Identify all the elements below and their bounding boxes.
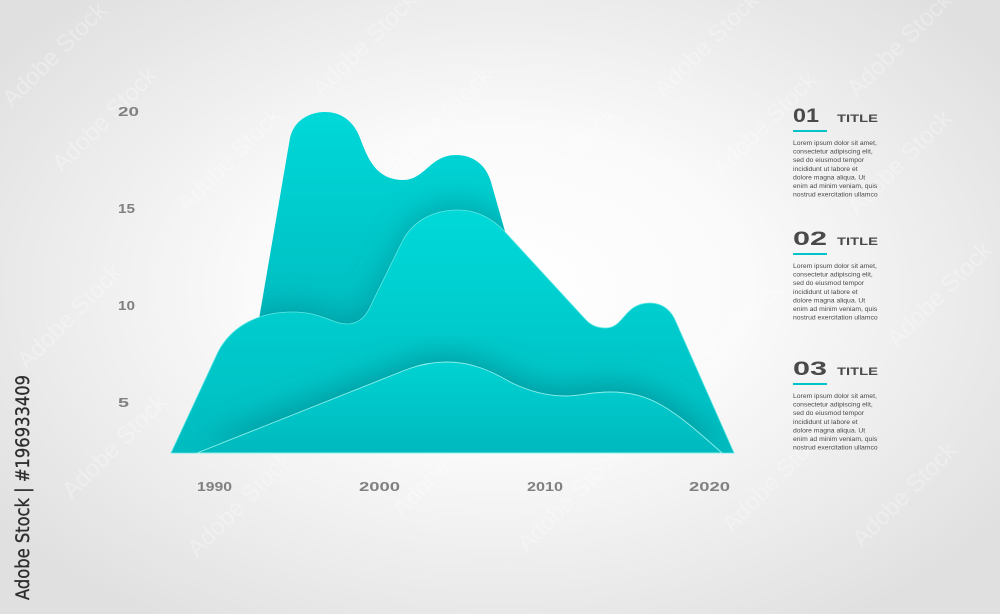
description 01: consectetur adipiscing elit, <box>793 149 873 156</box>
description 02: enim ad minim veniam, quis <box>793 306 878 313</box>
description 03: dolore magna aliqua. Ut <box>793 427 865 434</box>
watermark pattern: Adobe Stock <box>717 421 833 537</box>
middle layer area <box>171 210 734 453</box>
title 03: TITLE <box>837 366 878 378</box>
x axis labels: 2010 <box>527 479 563 494</box>
underline 02 <box>793 253 827 255</box>
number 02: 02 <box>793 229 827 250</box>
description 03: enim ad minim veniam, quis <box>793 436 878 443</box>
description 01: incididunt ut labore et <box>793 166 858 173</box>
description 01: Lorem ipsum dolor sit amet, <box>793 140 877 147</box>
watermark pattern: Adobe Stock <box>512 441 628 557</box>
y axis labels: 5 <box>118 395 129 410</box>
y axis labels: 20 <box>118 104 139 119</box>
number 03: 03 <box>793 359 827 380</box>
x axis labels: 1990 <box>197 479 232 494</box>
description 01: sed do eiusmod tempor <box>793 157 865 164</box>
title 01: TITLE <box>837 113 878 125</box>
y axis labels: 15 <box>118 201 135 216</box>
watermark pattern: Adobe Stock <box>47 61 163 177</box>
description 02: consectetur adipiscing elit, <box>793 272 873 279</box>
watermark pattern: Adobe Stock <box>382 61 498 177</box>
underline 03 <box>793 383 827 385</box>
watermark pattern: Adobe Stock <box>552 241 668 357</box>
watermark pattern: Adobe Stock <box>387 406 503 522</box>
watermark pattern: Adobe Stock <box>842 104 958 220</box>
number 01: 01 <box>793 106 820 127</box>
stock id sidebar text: Adobe Stock | #196933409 <box>13 375 34 600</box>
watermark pattern: Adobe Stock <box>182 446 298 562</box>
middle layer shadow <box>197 354 722 445</box>
underline 01 <box>793 130 827 132</box>
description 03: nostrud exercitation ullamco <box>793 445 878 452</box>
area chart <box>171 112 734 453</box>
watermark pattern: Adobe Stock <box>347 256 463 372</box>
watermark pattern: Adobe Stock <box>672 276 788 392</box>
x axis labels <box>197 479 730 494</box>
watermark pattern: Adobe Stock <box>847 436 963 552</box>
watermark pattern: Adobe Stock <box>12 258 128 374</box>
watermark pattern: Adobe Stock <box>172 101 288 217</box>
y axis labels: 10 <box>118 298 135 313</box>
description 03: Lorem ipsum dolor sit amet, <box>793 393 877 400</box>
description 02: incididunt ut labore et <box>793 289 858 296</box>
description 02: dolore magna aliqua. Ut <box>793 297 865 304</box>
watermark pattern: Adobe Stock <box>707 66 823 182</box>
description 03: consectetur adipiscing elit, <box>793 402 873 409</box>
back layer shadow <box>260 194 505 324</box>
legend item 02 <box>793 229 879 322</box>
description 02: sed do eiusmod tempor <box>793 280 865 287</box>
description 03: sed do eiusmod tempor <box>793 410 865 417</box>
back layer area <box>258 112 506 340</box>
x axis labels: 2000 <box>359 479 400 494</box>
description 02: Lorem ipsum dolor sit amet, <box>793 263 877 270</box>
watermark pattern: Adobe Stock <box>57 388 173 504</box>
description 02: nostrud exercitation ullamco <box>793 315 878 322</box>
legend item 01 <box>793 106 879 199</box>
x axis labels: 2020 <box>689 479 730 494</box>
watermark pattern: Adobe Stock <box>222 226 338 342</box>
title 02: TITLE <box>837 236 878 248</box>
y axis labels <box>118 104 139 410</box>
description 03: incididunt ut labore et <box>793 419 858 426</box>
front layer area <box>197 362 722 453</box>
description 01: enim ad minim veniam, quis <box>793 183 878 190</box>
watermark pattern: Adobe Stock <box>882 236 998 352</box>
watermark pattern: Adobe Stock <box>507 101 623 217</box>
description 01: dolore magna aliqua. Ut <box>793 174 865 181</box>
description 01: nostrud exercitation ullamco <box>793 192 878 199</box>
legend item 03 <box>793 359 879 452</box>
